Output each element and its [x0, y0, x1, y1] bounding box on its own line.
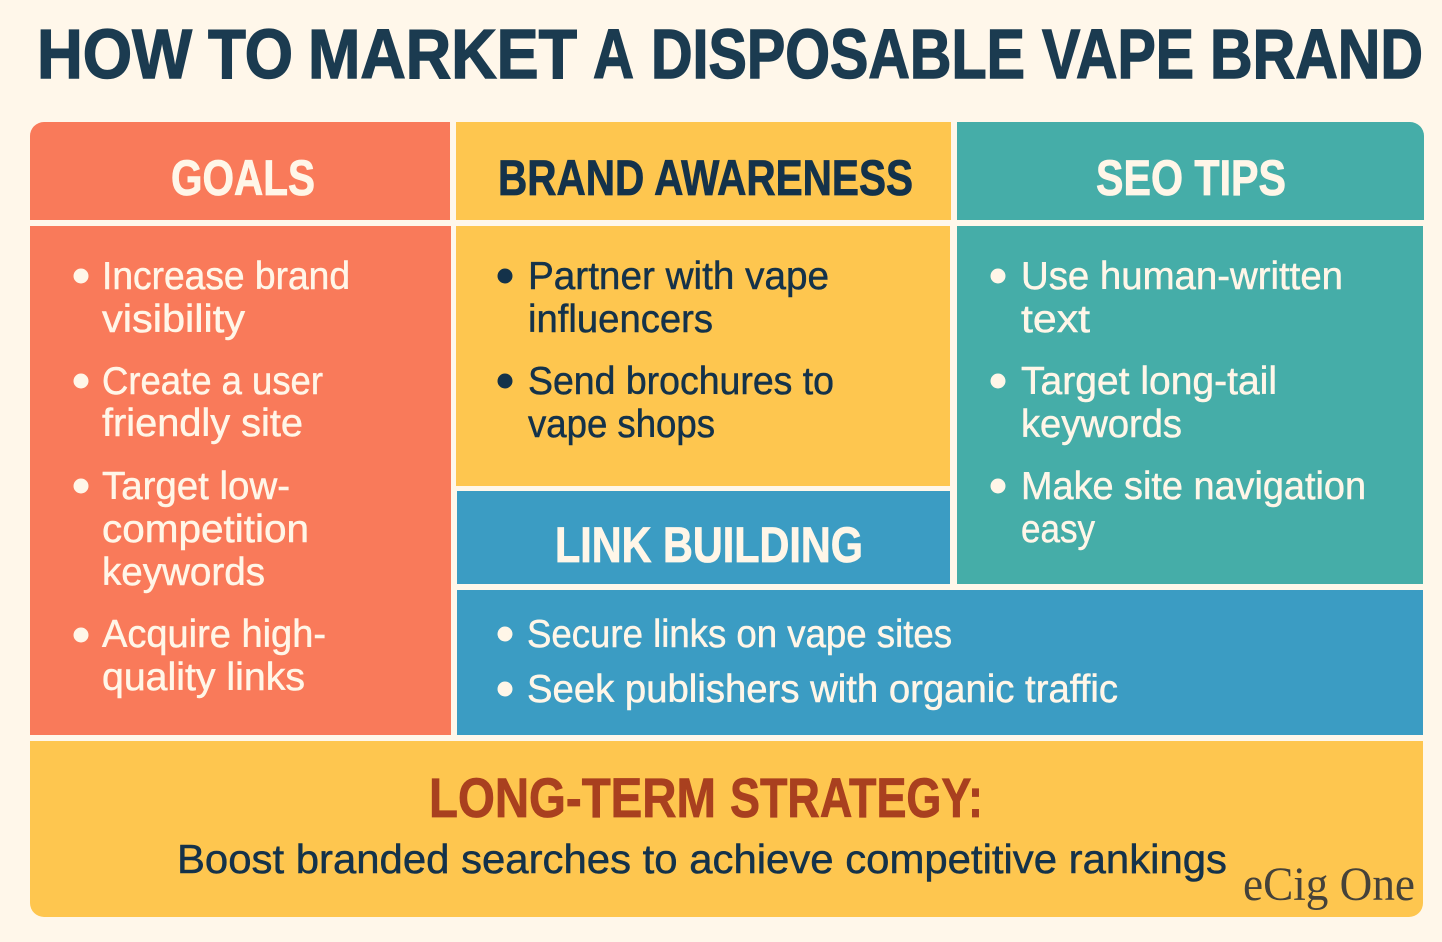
goals list: keywords	[102, 551, 265, 594]
heading: seo tips: SEO TIPS	[1096, 150, 1286, 206]
title: DISPOSABLE	[651, 15, 1025, 93]
goals body background	[30, 226, 451, 735]
seo tips list: Use human-written	[1021, 255, 1343, 298]
heading: goals: GOALS	[171, 150, 315, 206]
title: VAPE	[1042, 15, 1194, 93]
goals list: quality links	[102, 656, 305, 699]
goals header background	[30, 122, 450, 220]
brand awareness list: vape shops	[528, 403, 715, 446]
goals list: Increase brand	[102, 255, 350, 298]
strategy heading: STRATEGY:	[730, 766, 983, 829]
seo tips list: keywords	[1021, 403, 1182, 446]
title: TO	[208, 15, 293, 93]
brand awareness list	[498, 255, 834, 446]
heading: link building: LINK BUILDING	[555, 517, 863, 573]
goals list: Acquire high-	[102, 613, 326, 656]
title	[37, 15, 1423, 93]
strategy heading	[429, 766, 983, 829]
seo tips list: easy	[1021, 508, 1095, 551]
goals list	[74, 255, 350, 699]
watermark: eCig One	[1243, 858, 1415, 911]
panel: brand awareness	[456, 122, 951, 486]
seo tips list: Make site navigation	[1021, 465, 1366, 508]
brand awareness body background	[456, 226, 950, 486]
strategy heading: LONG-TERM	[429, 766, 716, 829]
panel: link building	[457, 491, 1423, 735]
seo tips list: Target long-tail	[1021, 360, 1277, 403]
strategy background	[30, 741, 1423, 917]
link building list: Secure links on vape sites	[527, 613, 952, 656]
goals list: Create a user	[102, 360, 323, 403]
brand awareness list: influencers	[528, 298, 713, 341]
goals list: visibility	[102, 298, 246, 341]
link building list: Seek publishers with organic traffic	[527, 668, 1118, 711]
brand awareness list: Send brochures to	[528, 360, 834, 403]
seo tips header background	[957, 122, 1424, 220]
seo tips body background	[957, 226, 1423, 584]
seo tips list: text	[1021, 298, 1090, 341]
title: A	[593, 15, 634, 93]
strategy text: Boost branded searches to achieve competitive rankings	[177, 836, 1227, 882]
goals list: Target low-	[102, 465, 290, 508]
panel: long-term strategy	[30, 741, 1423, 917]
title: HOW	[37, 15, 192, 93]
heading: brand awareness: BRAND AWARENESS	[498, 150, 913, 206]
panel: goals	[30, 122, 451, 735]
brand awareness header background	[456, 122, 951, 220]
seo tips list	[991, 255, 1366, 551]
link building header background	[457, 491, 950, 584]
brand awareness list: Partner with vape	[528, 255, 829, 298]
goals list: competition	[102, 508, 309, 551]
panel: seo tips	[957, 122, 1424, 584]
link building list	[498, 613, 1118, 711]
title: MARKET	[308, 15, 577, 93]
link building body background	[457, 590, 1423, 735]
goals list: friendly site	[102, 402, 303, 445]
